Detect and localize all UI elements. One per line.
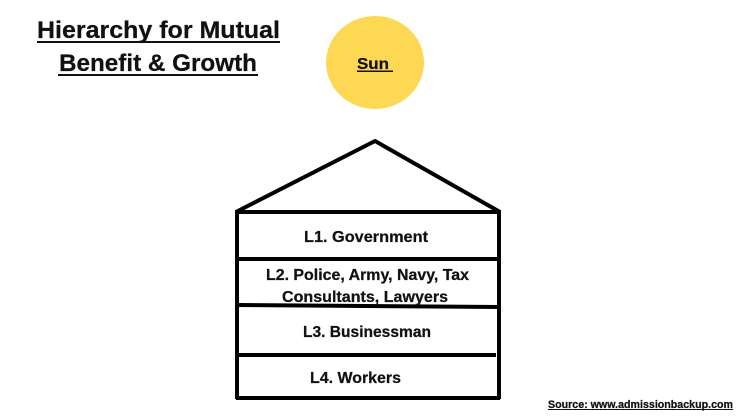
level 4 label: L4. Workers	[310, 370, 401, 387]
title	[37, 17, 280, 77]
level 2 label: L2. Police, Army, Navy, Tax	[266, 267, 469, 284]
house diagram	[235, 141, 501, 399]
icon: sun: Sun	[357, 56, 389, 73]
source credit: Source: www.admissionbackup.com	[548, 399, 733, 411]
level 3 label: L3. Businessman	[303, 324, 431, 341]
title: Benefit & Growth	[59, 50, 257, 77]
house outline	[235, 211, 501, 399]
level 1 label: L1. Government	[304, 229, 429, 246]
icon: sun	[326, 16, 424, 109]
level 2 label: Consultants, Lawyers	[282, 289, 448, 306]
roof	[236, 141, 500, 212]
title: Hierarchy for Mutual	[37, 17, 280, 44]
level 2 label	[266, 267, 469, 306]
